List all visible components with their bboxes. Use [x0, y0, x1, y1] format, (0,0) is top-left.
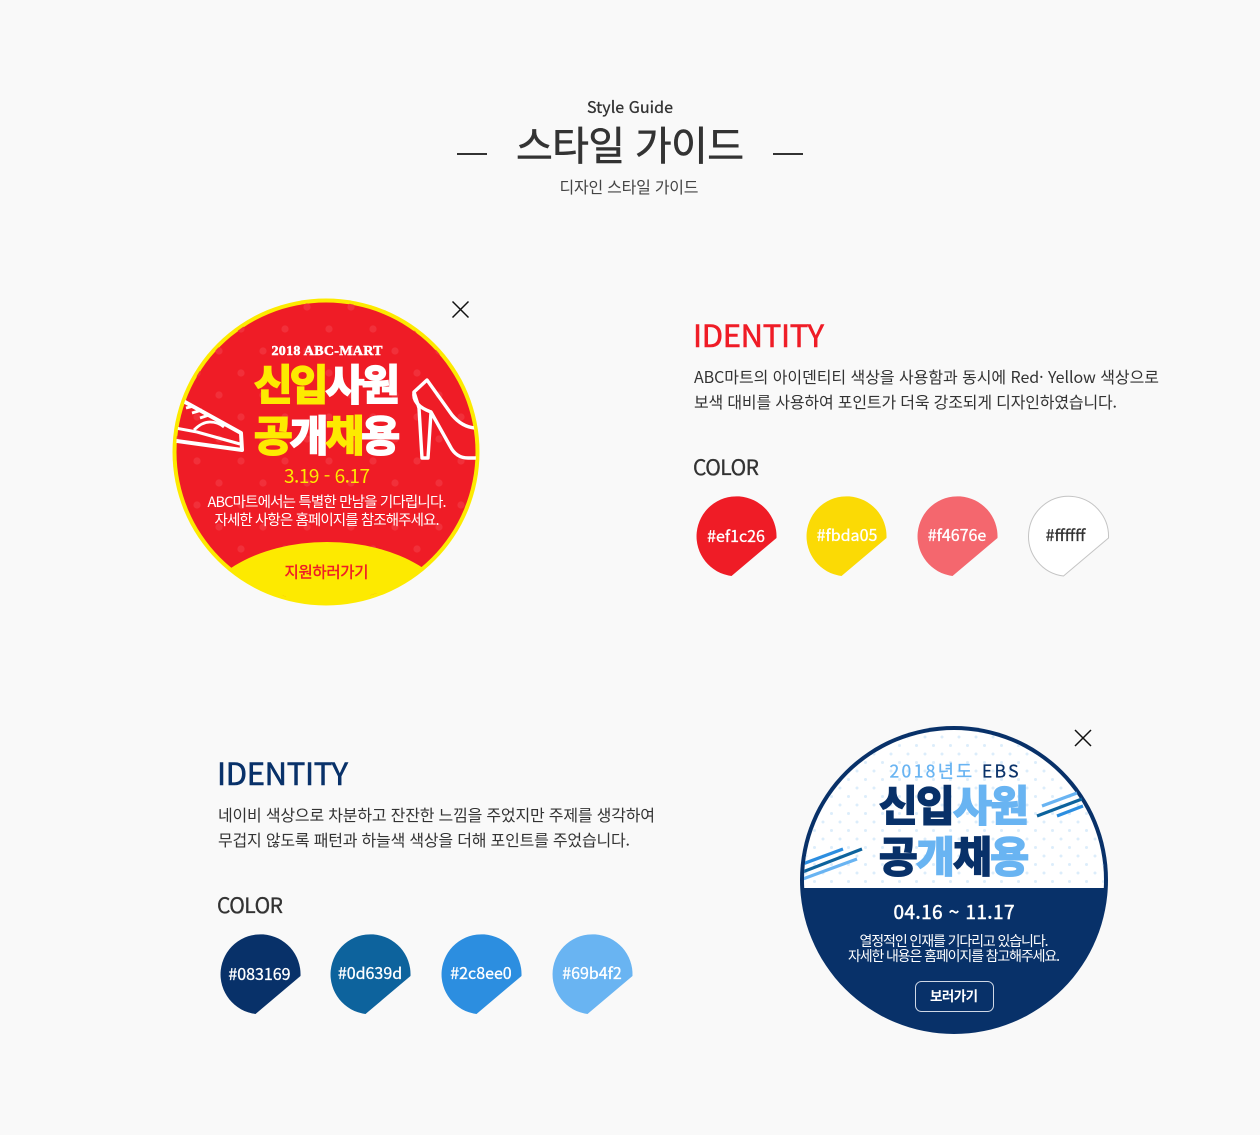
swatch: #69b4f2: #69b4f2 [562, 960, 622, 984]
swatch: #fbda05 [807, 496, 887, 576]
dates: 3.19 - 6.17 [284, 462, 370, 489]
description: 자세한 내용은 홈페이지를 참고해주세요. [848, 946, 1060, 966]
event label: 2018 ABC-MART [272, 344, 383, 359]
button label: 지원하러가기 [284, 560, 368, 582]
popup: ABC-Mart red circle [172, 298, 480, 606]
panel: red identity [693, 311, 1159, 576]
swatch: #083169 [221, 934, 301, 1014]
color label: COLOR [693, 452, 759, 482]
description: 자세한 사항은 홈페이지를 참조해주세요. [214, 509, 440, 530]
swatch: #ef1c26 [697, 496, 777, 576]
heading: IDENTITY [693, 311, 825, 356]
subtitle: 디자인 스타일 가이드 [560, 174, 698, 198]
stripes left [800, 849, 862, 880]
swatch: #f4676e [918, 496, 998, 576]
stripes right [1037, 793, 1083, 816]
description: ABC마트에서는 특별한 만남을 기다립니다. [208, 491, 446, 512]
body text: 네이비 색상으로 차분하고 잔잔한 느낌을 주었지만 주제를 생각하여 [218, 802, 655, 826]
header [457, 94, 803, 198]
color label: COLOR [217, 890, 283, 920]
body text: 보색 대비를 사용하여 포인트가 더욱 강조되게 디자인하였습니다. [694, 389, 1117, 413]
swatch: #0d639d: #0d639d [338, 960, 402, 984]
body text: ABC마트의 아이덴티티 색상을 사용함과 동시에 Red· Yellow 색상으로 [694, 364, 1159, 388]
button [916, 982, 994, 1012]
swatch: #f4676e: #f4676e [928, 522, 986, 546]
swatch: #ef1c26: #ef1c26 [707, 523, 765, 547]
dates: 04.16 ~ 11.17 [894, 898, 1014, 925]
eyebrow: Style Guide: Style Guide [587, 94, 673, 118]
swatch: #083169: #083169 [228, 961, 291, 985]
icon: close A [452, 302, 468, 318]
body text: 무겁지 않도록 패턴과 하늘색 색상을 더해 포인트를 주었습니다. [218, 827, 630, 851]
swatch: #2c8ee0: #2c8ee0 [450, 960, 512, 984]
button: 보러가기 [930, 985, 978, 1005]
swatch: #0d639d [331, 934, 411, 1014]
icon: sneaker [170, 398, 242, 450]
title: 스타일 가이드 [516, 114, 744, 172]
description: 열정적인 인재를 기다리고 있습니다. [860, 931, 1048, 951]
headline: 공개채용: 공개채용 [879, 824, 1029, 885]
swatch: #2c8ee0 [442, 934, 522, 1014]
heading: IDENTITY [217, 749, 349, 794]
popup: EBS navy circle [800, 726, 1108, 1034]
panel: navy identity [217, 749, 655, 1014]
swatch: #fbda05: #fbda05 [817, 522, 877, 546]
swatch: #ffffff: #ffffff [1046, 522, 1086, 546]
icon: close B [1075, 730, 1091, 746]
event label: 2018년도 EBS [890, 758, 1018, 784]
swatch: #ffffff [1029, 496, 1109, 576]
swatch: #69b4f2 [553, 934, 633, 1014]
headline: 신입사원: 신입사원 [254, 352, 400, 413]
yellow button arc [231, 542, 422, 602]
headline: 신입사원: 신입사원 [879, 773, 1029, 834]
headline: 공개채용: 공개채용 [254, 403, 400, 464]
icon: high heel [414, 380, 482, 458]
